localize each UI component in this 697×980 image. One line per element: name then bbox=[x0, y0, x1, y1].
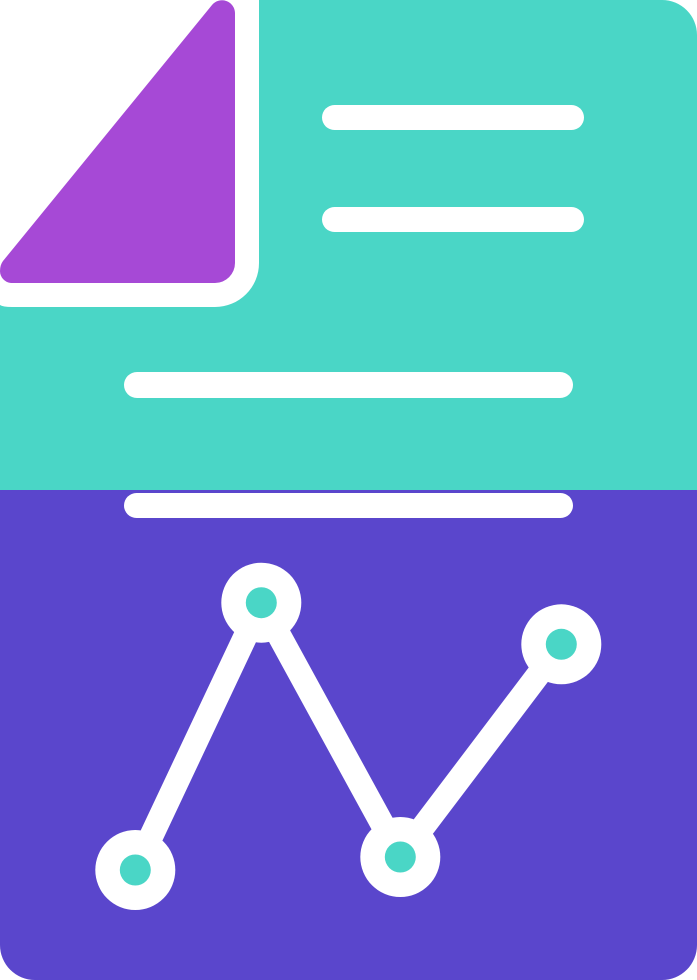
data point 2 bbox=[221, 563, 301, 643]
data point 1 bbox=[95, 830, 175, 910]
data point 3 bbox=[360, 817, 440, 897]
panel: indigo lower page bbox=[0, 490, 697, 980]
panel: teal upper page bbox=[0, 0, 697, 490]
line chart bbox=[95, 563, 601, 910]
icon: purple folded corner bbox=[0, 0, 235, 283]
text line 1 bbox=[322, 105, 584, 130]
chart line bbox=[135, 603, 561, 870]
data point 4 bbox=[521, 604, 601, 684]
text line 4 bbox=[124, 493, 573, 518]
text line 2 bbox=[322, 207, 584, 232]
text line 3 bbox=[124, 372, 573, 398]
